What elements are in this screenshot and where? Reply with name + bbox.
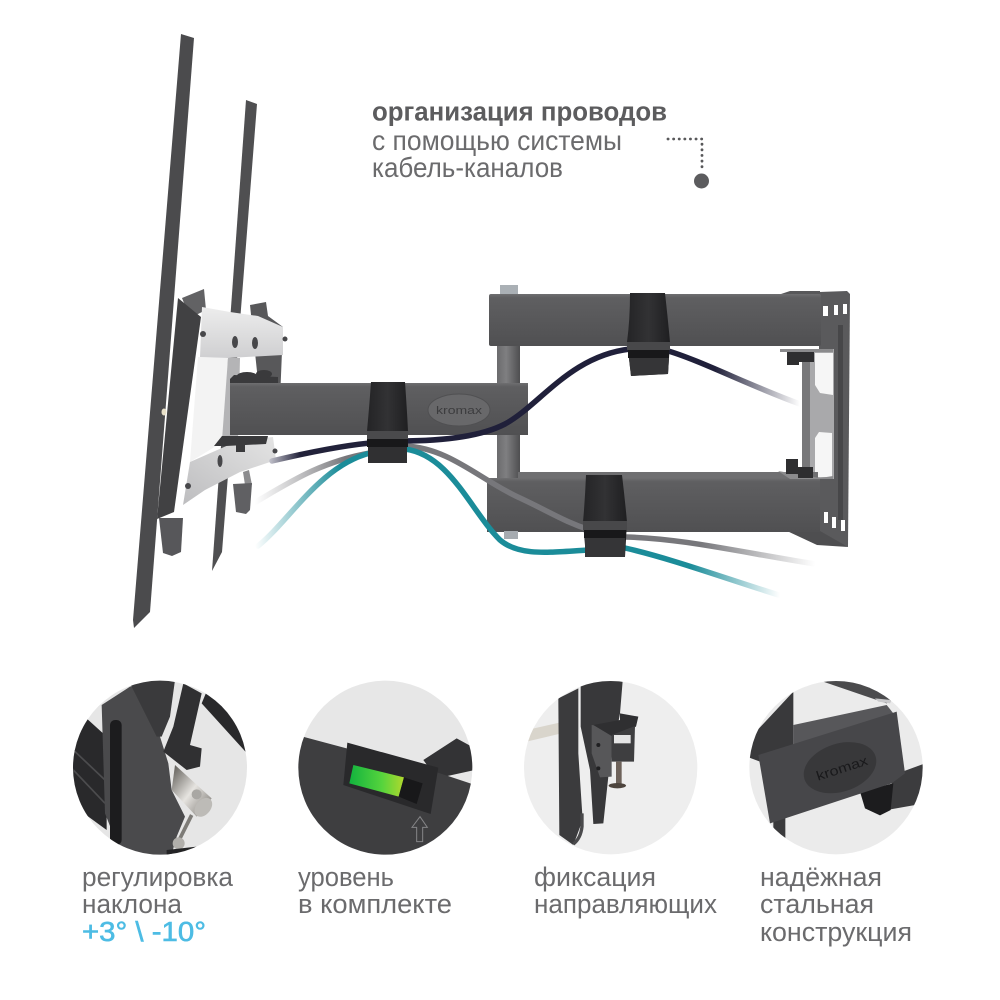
vertical mount: [222, 358, 240, 440]
level caption: в комплекте: [298, 889, 452, 919]
mid cable clip: [367, 382, 408, 463]
bracket bottom wedge: [787, 531, 848, 547]
top cable clip: [627, 293, 670, 376]
back light panel: [190, 357, 228, 462]
callout heading: организация проводов: [372, 96, 667, 126]
centre plate: [808, 349, 834, 479]
front lock tab: [159, 518, 183, 556]
wall bracket: [819, 291, 850, 547]
teal cable: [258, 453, 370, 546]
feature: rail lock: [520, 677, 717, 919]
tilt photo: [70, 677, 250, 860]
steel caption: [760, 862, 912, 947]
feature: steel construction: [747, 678, 927, 947]
callout body line 2: кабель-каналов: [372, 152, 563, 183]
rear bracket tab: [182, 289, 206, 318]
steel photo: [747, 678, 927, 858]
rail lock caption: [534, 862, 717, 919]
steel photo: kromax: [814, 753, 870, 784]
mount hole: [162, 408, 166, 416]
tilt caption: [82, 862, 234, 947]
dotted leader: [668, 139, 709, 188]
columns: [497, 340, 520, 485]
lower plate bolts: [185, 448, 278, 489]
lower bolt: [504, 531, 518, 539]
rods: [802, 352, 810, 470]
callout body line 1: с помощью системы: [372, 125, 622, 156]
callout: cable management: [372, 96, 667, 183]
cables: [254, 349, 815, 596]
lower window: [815, 432, 832, 477]
top bolt: [500, 285, 518, 294]
level caption: [298, 862, 452, 919]
upper window: [815, 353, 833, 395]
rear TV rail: [212, 100, 257, 571]
upper white plate: [200, 307, 283, 358]
lower arm: [487, 478, 820, 532]
dark center plate: [157, 298, 201, 519]
bracket top wedge: [775, 291, 820, 296]
tilt range: +3° \ -10°: [82, 916, 206, 947]
steel caption: стальная: [760, 889, 874, 919]
level caption: уровень: [298, 862, 394, 892]
rail lock caption: фиксация: [534, 862, 656, 892]
grey cable: [254, 453, 370, 503]
steel caption: конструкция: [760, 917, 912, 947]
level photo: [297, 678, 477, 860]
rail lock caption: направляющих: [534, 889, 717, 919]
lower cable clip: [583, 475, 627, 557]
feature: tilt adjustment: [70, 677, 250, 947]
steel caption: надёжная: [760, 862, 882, 892]
lower strip: [518, 472, 818, 479]
product: TV wall mount: [133, 34, 850, 628]
rear screws: [243, 470, 252, 485]
logo plate: [428, 394, 490, 426]
plate bolts: [200, 331, 288, 349]
tilt caption: регулировка: [82, 862, 234, 892]
top arm: [489, 294, 821, 346]
bracket slots: [823, 304, 847, 531]
rail lock photo: [524, 681, 698, 854]
dark cable: [272, 443, 370, 461]
mid arm: [230, 383, 528, 435]
feature: spirit level: [297, 678, 477, 919]
rear lock tab: [233, 483, 252, 514]
logo text: kromax: [436, 405, 483, 417]
lower flange and nuts: [778, 459, 833, 479]
rear bracket right: [250, 302, 283, 400]
upper flange and nuts: [780, 349, 833, 365]
front TV rail: [133, 34, 194, 628]
lower white plate: [183, 437, 276, 505]
small hinge bolts: [214, 370, 278, 452]
tilt caption: наклона: [82, 889, 183, 919]
bracket groove: [838, 325, 843, 520]
